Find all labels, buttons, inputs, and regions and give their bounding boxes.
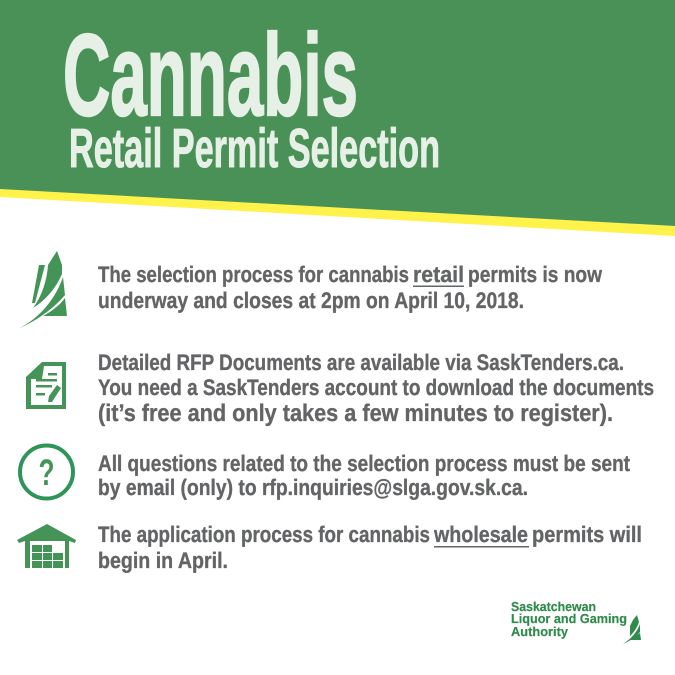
- footer logo: Saskatchewan Liquor and Gaming Authority: Authority: [511, 624, 569, 639]
- icon: document with pencil: [26, 362, 66, 409]
- text block: selection underway: The selection process for cannabis: [98, 262, 409, 287]
- text block: selection underway: permits is now: [468, 262, 602, 287]
- icon: SLGA leaf logo: [18, 251, 67, 329]
- text block: wholesale permits: permits will: [532, 522, 642, 547]
- text block: RFP documents: (it’s free and only takes a few minutes to register).: [98, 400, 613, 427]
- subtitle: Retail Permit Selection: [69, 117, 440, 179]
- text block: wholesale permits: wholesale: [433, 522, 528, 547]
- icon: question mark circle: ?: [38, 452, 54, 493]
- text block: selection underway: underway and closes at 2pm on April 10, 2018.: [98, 288, 524, 313]
- header banner: [0, 0, 675, 236]
- footer logo: Saskatchewan Liquor and Gaming Authority: Saskatchewan: [511, 599, 596, 614]
- text block: questions by email: by email (only) to rfp.inquiries@slga.gov.sk.ca.: [98, 475, 528, 500]
- text block: selection underway: retail: [413, 262, 464, 287]
- text block: wholesale permits: The application process for cannabis: [98, 522, 430, 547]
- text block: RFP documents: [98, 350, 654, 427]
- footer logo: Saskatchewan Liquor and Gaming Authority: [511, 599, 641, 644]
- text block: questions by email: [98, 451, 630, 500]
- text block: wholesale permits: [98, 522, 642, 573]
- text block: wholesale permits: begin in April.: [98, 548, 228, 573]
- icon: warehouse: [17, 524, 76, 568]
- footer logo: Saskatchewan Liquor and Gaming Authority: Liquor and Gaming: [511, 611, 627, 626]
- icon: question mark circle: [20, 446, 73, 498]
- title: Cannabis: [63, 10, 358, 140]
- text block: selection underway: [98, 262, 602, 313]
